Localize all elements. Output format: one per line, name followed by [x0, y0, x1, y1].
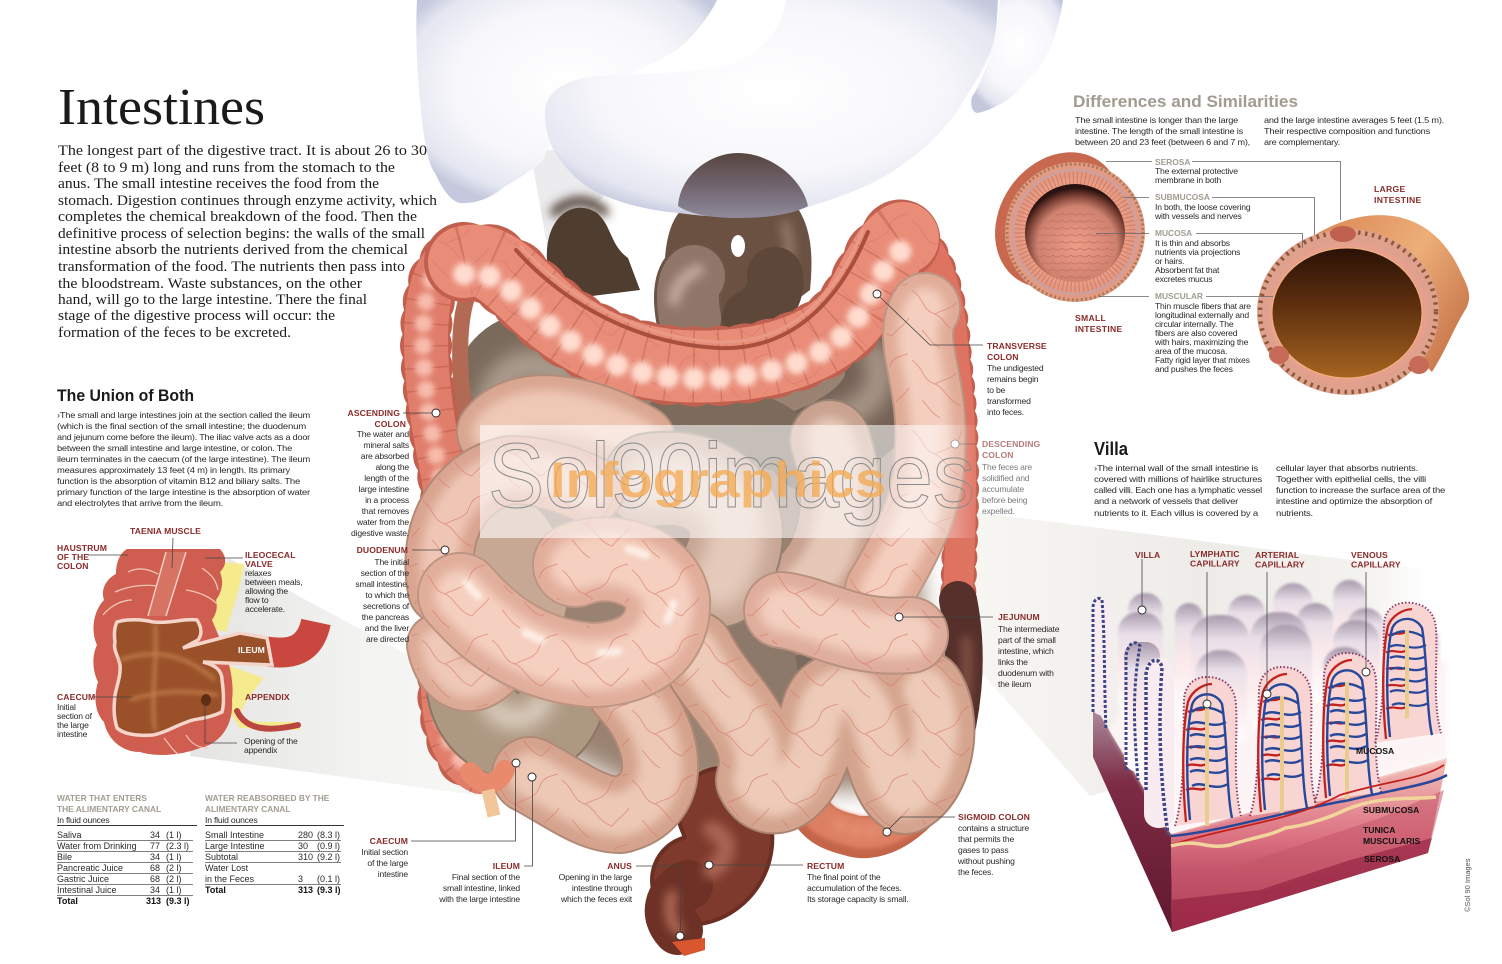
- upper brown organs: [530, 150, 811, 320]
- label: jejunum: The intermediate: [998, 624, 1060, 634]
- diagram: caecum cross-section: allowing the: [245, 586, 288, 596]
- intro text: transformation of the food. The nutrients then pass into: [58, 259, 405, 275]
- label: ascending colon: large intestine: [358, 484, 409, 494]
- table: water reabsorbed by the alimentary canal: Water Lost: [205, 863, 249, 873]
- text: villa: intestine and optimize the absorption of: [1276, 496, 1433, 506]
- diagram: villi tissue block: MUCOSA: [1356, 746, 1394, 756]
- text: differences and similarities: intestine. The length of the small intestine is: [1075, 126, 1243, 136]
- table: water reabsorbed by the alimentary canal: (9.2 l): [317, 852, 340, 862]
- diagram: caecum cross-section: Initial: [57, 702, 76, 712]
- label: duodenum: to which the: [366, 590, 409, 600]
- diagram: caecum cross-section: flow to: [245, 595, 269, 605]
- label: caecum: CAECUM: [370, 836, 408, 846]
- intro text: The longest part of the digestive tract. It is about 26 to 30: [58, 143, 427, 159]
- label: sigmoid colon: the feces.: [958, 867, 993, 877]
- labels: intestine wall layers: MUSCULAR: [1155, 291, 1203, 301]
- labels: intestine wall layers: In both, the loose covering: [1155, 202, 1251, 212]
- table: water reabsorbed by the alimentary canal: Total: [205, 885, 226, 895]
- table: water entering the alimentary canal: 34: [150, 852, 160, 862]
- intro text: hand, will go to the large intestine. There the final: [58, 292, 367, 308]
- table: water entering the alimentary canal: THE ALIMENTARY CANAL: [57, 804, 161, 814]
- table: water entering the alimentary canal: 68: [150, 863, 160, 873]
- diagram: caecum cross-section: relaxes: [245, 568, 271, 578]
- label: descending colon: accumulate: [982, 484, 1024, 494]
- label: ileum: [438, 773, 536, 904]
- intro text: [58, 143, 438, 341]
- diagram: caecum cross-section: accelerate.: [245, 604, 285, 614]
- text: villa: covered with millions of hairlike structures: [1094, 474, 1262, 484]
- diagram: caecum cross-section: COLON: [57, 561, 89, 571]
- intro text: the bloodstream. Waste substances, on the other: [58, 276, 362, 292]
- text: villa: nutrients to it. Each villus is covered by a: [1094, 508, 1258, 518]
- left face: [1093, 703, 1172, 932]
- labels: intestine wall layers: excretes mucus: [1155, 274, 1212, 284]
- label: ascending colon: that removes: [362, 506, 409, 516]
- labels: intestine wall layers: with hairs, maximizing the: [1154, 337, 1249, 347]
- table: water reabsorbed by the alimentary canal: 30: [298, 841, 308, 851]
- table: water reabsorbed by the alimentary canal: 313: [298, 885, 313, 895]
- intro text: anus. The small intestine receives the food from the: [58, 176, 379, 192]
- label: caecum: [361, 759, 520, 879]
- table: water entering the alimentary canal: [57, 793, 197, 906]
- labels: intestine wall layers: membrane in both: [1155, 175, 1221, 185]
- label: ileum: small intestine, linked: [443, 883, 520, 893]
- label: rectum: Its storage capacity is small.: [807, 894, 908, 904]
- zoom wedge: villa detail: [974, 512, 1430, 796]
- table: water reabsorbed by the alimentary canal: (0.9 l): [317, 841, 340, 851]
- table: water entering the alimentary canal: (1 l): [166, 885, 182, 895]
- table: water entering the alimentary canal: (2 l): [166, 874, 182, 884]
- label: rectum: accumulation of the feces.: [807, 883, 902, 893]
- table: water entering the alimentary canal: (1 l): [166, 852, 182, 862]
- heading: villa: Villa: [1094, 439, 1129, 459]
- label: ileum: ILEUM: [493, 861, 520, 871]
- text: the union of both: and jejunum come before the ileum). The iliac valve acts as a door: [57, 432, 310, 442]
- labels: intestine wall layers: MUCOSA: [1155, 228, 1192, 238]
- heading: differences and similarities: Differences and Similarities: [1073, 92, 1298, 111]
- transverse colon: [464, 230, 903, 378]
- diagram: caecum cross-section: intestine: [57, 729, 88, 739]
- diagram: villi tissue block: CAPILLARY: [1255, 560, 1305, 570]
- labels: intestine wall layers: longitudinal externally and: [1155, 310, 1249, 320]
- text: the union of both: and electrolytes that arrive from the ileum.: [57, 498, 223, 508]
- table: water entering the alimentary canal: Saliva: [57, 830, 82, 840]
- diagram: caecum cross-section: [57, 526, 316, 755]
- table: water entering the alimentary canal: Pancreatic Juice: [57, 863, 123, 873]
- table: water reabsorbed by the alimentary canal: (8.3 l): [317, 830, 340, 840]
- labels: intestine wall layers: [1075, 157, 1422, 374]
- diagram: caecum cross-section: ILEOCECAL: [245, 550, 296, 560]
- table: water entering the alimentary canal: 34: [150, 885, 160, 895]
- colon wall: [93, 549, 233, 755]
- small intestine loops: [438, 308, 935, 815]
- brown interior: [114, 620, 272, 735]
- zoom wedge: caecum detail: [190, 558, 482, 796]
- labels: intestine wall layers: SEROSA: [1155, 157, 1190, 167]
- table: water entering the alimentary canal: 68: [150, 874, 160, 884]
- diagram: villi tissue block: MUSCULARIS: [1363, 836, 1421, 846]
- labels: intestine wall layers: The external protective: [1155, 166, 1238, 176]
- table: water entering the alimentary canal: (1 l): [166, 830, 182, 840]
- illustration: digestive organs: [416, 0, 1063, 956]
- table: water entering the alimentary canal: 77: [150, 841, 160, 851]
- labels: intestine wall layers: Fatty rigid layer that mixes: [1155, 355, 1250, 365]
- label: ascending colon: digestive waste.: [351, 528, 409, 538]
- watermark band: Infographics: [550, 452, 886, 508]
- text: villa: called villi. Each one has a lymphatic vessel: [1094, 485, 1262, 495]
- table: water entering the alimentary canal: In fluid ounces: [57, 815, 109, 825]
- text: the union of both: function is the absorption of vitamin B12 and biliary salts. The: [57, 476, 300, 486]
- label: sigmoid colon: gases to pass: [958, 845, 1008, 855]
- diagram: caecum cross-section: between meals,: [245, 577, 302, 587]
- text: villa: function to increase the surface area of the: [1276, 485, 1445, 495]
- label: duodenum: the pancreas: [362, 612, 409, 622]
- intro text: intestine absorb the nutrients derived from the chemical: [58, 242, 408, 258]
- table: water reabsorbed by the alimentary canal: (0.1 l): [317, 874, 340, 884]
- label: ascending colon: are absorbed: [361, 451, 409, 461]
- label: transverse colon: The undigested: [987, 363, 1044, 373]
- label: rectum: RECTUM: [807, 861, 844, 871]
- table: water entering the alimentary canal: 313: [146, 896, 161, 906]
- label: ascending colon: along the: [375, 462, 409, 472]
- table: water entering the alimentary canal: Water from Drinking: [57, 841, 137, 851]
- labels: intestine wall layers: or hairs.: [1155, 256, 1184, 266]
- label: sigmoid colon: [883, 812, 1030, 877]
- diagram: villi tissue block: SEROSA: [1364, 854, 1400, 864]
- submucosal vessels: [1171, 765, 1447, 846]
- label: jejunum: the ileum: [998, 679, 1031, 689]
- labels: intestine wall layers: INTESTINE: [1075, 324, 1123, 334]
- diagram: villi tissue block: ARTERIAL: [1255, 550, 1299, 560]
- label: caecum: intestine: [378, 869, 408, 879]
- label: sigmoid colon: without pushing: [957, 856, 1015, 866]
- stomach and liver silhouettes: [416, 0, 1063, 217]
- label: jejunum: part of the small: [998, 635, 1056, 645]
- table: water entering the alimentary canal: (9.3 l): [166, 896, 190, 906]
- table: water reabsorbed by the alimentary canal: ALIMENTARY CANAL: [205, 804, 290, 814]
- floor: [1110, 660, 1447, 834]
- brown back loops of small intestine: [460, 295, 900, 720]
- label: ascending colon: in a process: [365, 495, 409, 505]
- diagram: caecum cross-section: VALVE: [245, 559, 273, 569]
- label: ascending colon: water from the: [356, 517, 409, 527]
- label: rectum: [705, 861, 908, 904]
- text: differences and similarities: and the large intestine averages 5 feet (1.5 m).: [1264, 115, 1444, 125]
- diagram: large intestine section: [1257, 215, 1469, 395]
- labels: intestine wall layers: fibers are also covered: [1155, 328, 1238, 338]
- label: transverse colon: into feces.: [987, 407, 1024, 417]
- intro text: formation of the feces to be excreted.: [58, 325, 291, 341]
- label: duodenum: section of the: [361, 568, 409, 578]
- diagram: villi tissue block: CAPILLARY: [1351, 560, 1401, 570]
- text: differences and similarities: Their respective composition and functions: [1264, 126, 1430, 136]
- diagram: caecum cross-section: appendix: [244, 745, 278, 755]
- table: water reabsorbed by the alimentary canal: [205, 793, 344, 895]
- table: water reabsorbed by the alimentary canal: Large Intestine: [205, 841, 265, 851]
- intro text: completes the chemical breakdown of the food. Then the: [58, 209, 417, 225]
- villa labels: VILLA: [1135, 550, 1160, 560]
- text: the union of both: (which is the final section of the small intestine; the duodenum: [57, 421, 306, 431]
- intro text: definitive process of selection begins: the walls of the small: [58, 226, 425, 242]
- label: ascending colon: ASCENDING: [348, 408, 400, 418]
- intro text: feet (8 to 9 m) long and runs from the stomach to the: [58, 160, 395, 176]
- label: transverse colon: COLON: [987, 352, 1019, 362]
- label: anus: which the feces exit: [560, 894, 633, 904]
- label: transverse colon: TRANSVERSE: [987, 341, 1047, 351]
- label: duodenum: small intestine,: [355, 579, 409, 589]
- label: sigmoid colon: contains a structure: [958, 823, 1029, 833]
- text: the union of both: primary function of the large intestine is the absorption of water: [57, 487, 310, 497]
- cut-edge villi: [1092, 597, 1174, 834]
- soft underlay of the abdomen: [490, 340, 930, 790]
- table: water entering the alimentary canal: 34: [150, 830, 160, 840]
- table: water entering the alimentary canal: Total: [57, 896, 78, 906]
- label: ileum: with the large intestine: [438, 894, 520, 904]
- table: water reabsorbed by the alimentary canal: Small Intestine: [205, 830, 264, 840]
- front villi with vessels: [1175, 603, 1441, 826]
- label: duodenum: and the liver: [365, 623, 409, 633]
- label: anus: ANUS: [607, 861, 632, 871]
- label: jejunum: intestine, which: [998, 646, 1054, 656]
- intro text: stage of the digestive process will occur: the: [58, 308, 335, 324]
- table: water reabsorbed by the alimentary canal: (9.3 l): [317, 885, 341, 895]
- labels: intestine wall layers: and pushes the feces: [1155, 364, 1233, 374]
- diagram: villi tissue block: TUNICA: [1363, 825, 1395, 835]
- diagram: caecum cross-section: section of: [57, 711, 93, 721]
- text: the union of both: ileum terminates in the caecum (of the large intestine). The ileum: [57, 454, 310, 464]
- label: duodenum: secretions of: [363, 601, 410, 611]
- table: water reabsorbed by the alimentary canal: WATER REABSORBED BY THE: [205, 793, 330, 803]
- text: villa: [1094, 463, 1445, 518]
- labels: intestine wall layers: Thin muscle fibers that are: [1155, 301, 1251, 311]
- label: ascending colon: [348, 408, 440, 538]
- heading: the union of both: The Union of Both: [57, 386, 194, 405]
- text: differences and similarities: are complementary.: [1264, 137, 1340, 147]
- labels: intestine wall layers: INTESTINE: [1374, 195, 1422, 205]
- label: descending colon: expelled.: [982, 506, 1015, 516]
- diagram: caecum cross-section: ILEUM: [238, 645, 265, 655]
- labels: intestine wall layers: nutrients via projections: [1155, 247, 1240, 257]
- table: water reabsorbed by the alimentary canal: in the Feces: [205, 874, 255, 884]
- label: descending colon: DESCENDING: [982, 439, 1041, 449]
- table: water entering the alimentary canal: (2.3 l): [166, 841, 189, 851]
- text: villa: nutrients.: [1276, 508, 1313, 518]
- caecum labels: TAENIA MUSCLE: [130, 526, 201, 536]
- intro text: stomach. Digestion continues through enzyme activity, which: [58, 193, 438, 209]
- label: sigmoid colon: that permits the: [958, 834, 1014, 844]
- label: rectum: The final point of the: [807, 872, 881, 882]
- table: water entering the alimentary canal: (2 l): [166, 863, 182, 873]
- label: jejunum: links the: [998, 657, 1028, 667]
- back villi: [1118, 580, 1440, 777]
- label: anus: [559, 861, 684, 940]
- label: caecum: of the large: [367, 858, 408, 868]
- diagram: villi tissue block: [1092, 549, 1447, 932]
- diagram: caecum cross-section: CAECUM: [57, 692, 95, 702]
- table: water reabsorbed by the alimentary canal: In fluid ounces: [205, 815, 257, 825]
- label: jejunum: JEJUNUM: [998, 612, 1040, 622]
- labels: intestine wall layers: SMALL: [1075, 313, 1106, 323]
- labels: intestine wall layers: Absorbent fat that: [1155, 265, 1220, 275]
- ileum tube: [264, 622, 316, 653]
- rectum and anus: [670, 812, 728, 956]
- table: water reabsorbed by the alimentary canal: 3: [298, 874, 303, 884]
- label: ascending colon: mineral salts: [363, 440, 409, 450]
- title: Intestines: [58, 79, 265, 136]
- text: the union of both: measures approximately 13 feet (4 m) in length. Its primary: [57, 465, 291, 475]
- label: duodenum: are directed: [366, 634, 409, 644]
- labels: intestine wall layers: It is thin and absorbs: [1155, 238, 1230, 248]
- labels: intestine wall layers: area of the mucosa.: [1155, 346, 1227, 356]
- text: the union of both: ›The small and large intestines join at the section called the ileum: [57, 410, 310, 420]
- label: jejunum: duodenum with: [998, 668, 1054, 678]
- text: villa: and a network of vessels that deliver: [1094, 496, 1238, 506]
- label: sigmoid colon: SIGMOID COLON: [958, 812, 1030, 822]
- diagram: villi tissue block: VENOUS: [1351, 550, 1388, 560]
- diagram: caecum cross-section: HAUSTRUM: [57, 543, 107, 553]
- label: descending colon: COLON: [982, 450, 1014, 460]
- label: transverse colon: transformed: [987, 396, 1031, 406]
- label: descending colon: before being: [982, 495, 1028, 505]
- diagram: caecum cross-section: OF THE: [57, 552, 89, 562]
- ascending colon: [423, 255, 480, 772]
- label: descending colon: solidified and: [982, 473, 1030, 483]
- diagram: villi tissue block: LYMPHATIC: [1190, 549, 1240, 559]
- appendix: [237, 711, 298, 729]
- labels: intestine wall layers: with vessels and nerves: [1154, 211, 1242, 221]
- table: water entering the alimentary canal: Bile: [57, 852, 72, 862]
- right face layers: [1171, 758, 1447, 932]
- taenia muscle: [148, 552, 186, 616]
- text: villa: Together with epithelial cells, the villi: [1276, 474, 1426, 484]
- diagram: small intestine section: [969, 128, 1147, 312]
- label: jejunum: [895, 612, 1060, 689]
- table: water entering the alimentary canal: WATER THAT ENTERS: [57, 793, 147, 803]
- label: ascending colon: COLON: [374, 419, 406, 429]
- text: differences and similarities: between 20 and 23 feet (between 6 and 7 m),: [1075, 137, 1250, 147]
- label: ascending colon: length of the: [364, 473, 409, 483]
- watermark band: Sol90images: [488, 425, 975, 527]
- leader lines: [172, 538, 173, 568]
- labels: intestine wall layers: circular internally. The: [1155, 319, 1234, 329]
- diagram: caecum cross-section: APPENDIX: [245, 692, 290, 702]
- label: descending colon: [959, 439, 1041, 516]
- label: descending colon: The feces are: [982, 462, 1032, 472]
- labels: intestine wall layers: SUBMUCOSA: [1155, 192, 1210, 202]
- credit: ©Sol 90 Images: [1463, 858, 1472, 912]
- caecum tip and appendix: [470, 770, 505, 816]
- label: transverse colon: [873, 290, 1047, 417]
- text: differences and similarities: [1075, 115, 1444, 147]
- diagram: caecum cross-section: Opening of the: [244, 736, 298, 746]
- label: transverse colon: remains begin: [987, 374, 1039, 384]
- table: water reabsorbed by the alimentary canal: 280: [298, 830, 313, 840]
- table: water reabsorbed by the alimentary canal: 310: [298, 852, 313, 862]
- text: villa: cellular layer that absorbs nutrients.: [1276, 463, 1418, 473]
- label: duodenum: [355, 545, 449, 644]
- table: water entering the alimentary canal: Gastric Juice: [57, 874, 109, 884]
- label: caecum: Initial section: [361, 847, 408, 857]
- label: anus: intestine through: [572, 883, 632, 893]
- leader lines and callout dots: [1142, 559, 1366, 700]
- sigmoid colon: [810, 600, 967, 837]
- table: water entering the alimentary canal: Intestinal Juice: [57, 885, 117, 895]
- diagram: caecum cross-section: the large: [57, 720, 89, 730]
- label: transverse colon: to be: [987, 385, 1006, 395]
- label: anus: Opening in the large: [559, 872, 632, 882]
- labels: intestine wall layers: LARGE: [1374, 184, 1406, 194]
- table: water reabsorbed by the alimentary canal: Subtotal: [205, 852, 238, 862]
- label: duodenum: The initial: [374, 557, 409, 567]
- dark organ seen through stomach: [678, 153, 808, 218]
- yellow fat: [208, 562, 244, 632]
- label: ileum: Final section of the: [452, 872, 520, 882]
- label: duodenum: DUODENUM: [357, 545, 408, 555]
- text: villa: ›The internal wall of the small intestine is: [1094, 463, 1258, 473]
- text: the union of both: [57, 410, 310, 508]
- label: ascending colon: The water and: [357, 429, 409, 439]
- diagram: villi tissue block: SUBMUCOSA: [1363, 805, 1419, 815]
- text: the union of both: between the small intestine and large intestine, or colon. The: [57, 443, 292, 453]
- diagram: villi tissue block: CAPILLARY: [1190, 558, 1240, 568]
- descending colon: [905, 232, 961, 600]
- text: differences and similarities: The small intestine is longer than the large: [1075, 115, 1238, 125]
